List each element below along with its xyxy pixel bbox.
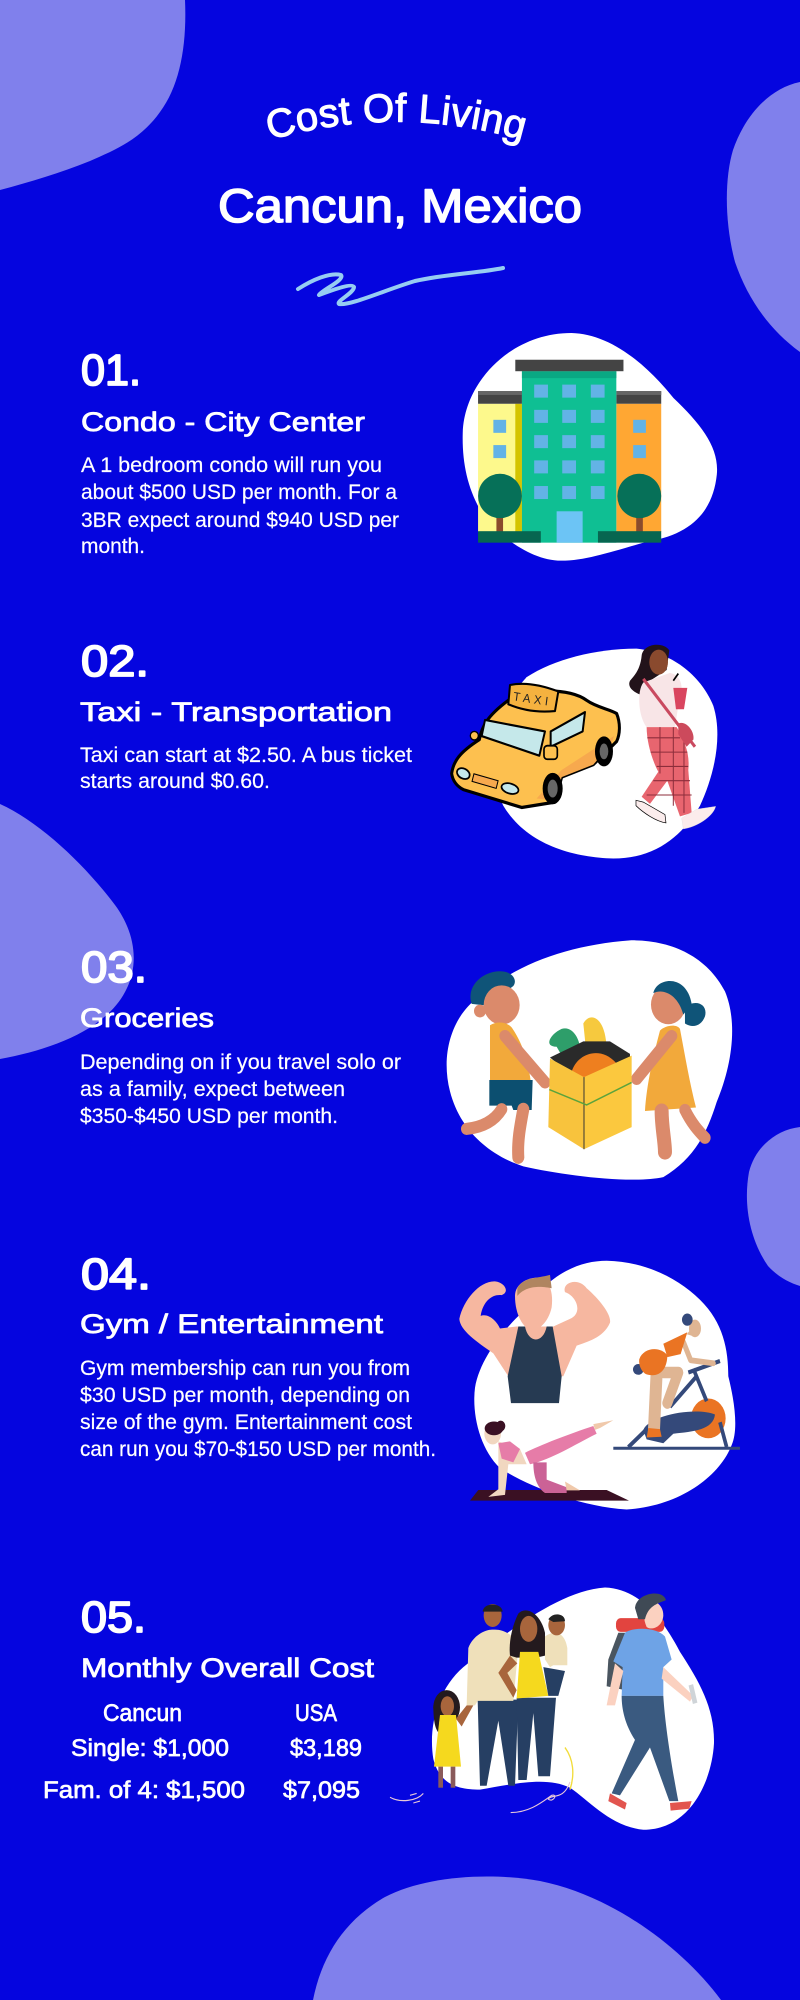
boy [467,971,545,1157]
cost comparison table: Single: $1,000 [71,1735,229,1762]
mother with child [498,1610,567,1780]
heading gym: Gym / Entertainment [80,1309,384,1339]
body groceries: as a family, expect between [80,1078,345,1101]
body taxi [80,744,412,793]
number 01: 01. [81,346,141,395]
title: Cost Of Living: Cost Of Living [267,92,526,146]
grocery bag [548,1017,632,1149]
section 04: gym text [80,1250,436,1461]
section 05: monthly overall cost text [43,1593,375,1804]
body condo: month. [81,535,145,558]
body gym: Gym membership can run you from [80,1357,410,1380]
girl [637,981,705,1152]
illustration: family carrying grocery bag [447,940,732,1180]
number 03: 03. [81,943,147,992]
number 04: 04. [81,1250,151,1299]
body taxi: Taxi can start at $2.50. A bus ticket [80,744,412,767]
hedges [478,531,541,543]
body groceries [80,1051,401,1128]
illustration: gym activities [459,1261,740,1509]
taxi [452,684,619,807]
father [467,1604,518,1786]
walking woman [629,645,716,829]
yoga woman [470,1420,629,1501]
section 01: condo text [81,346,399,558]
cost comparison table: USA [295,1700,337,1727]
cyclist [613,1314,740,1450]
heading taxi: Taxi - Transportation [80,697,392,727]
body gym: size of the gym. Entertainment cost [80,1411,412,1434]
cost comparison table: Cancun [103,1700,182,1727]
title: Cancun, Mexico: Cancun, Mexico [218,179,582,232]
squiggle underline [298,268,503,304]
decorative blob: top left [0,0,185,190]
backpacker [607,1593,697,1811]
door [557,511,583,543]
body condo [81,454,399,558]
body groceries: Depending on if you travel solo or [80,1051,401,1074]
left wing [478,404,522,532]
decorative blob: middle right [747,1127,800,1286]
main tower [522,371,616,543]
bodybuilder [459,1275,610,1403]
number 05: 05. [81,1593,146,1642]
decorative blob: top right [727,82,800,352]
decorative blob: bottom [313,1876,721,2000]
body gym [80,1357,436,1461]
windows [493,385,646,499]
cost comparison table [43,1700,362,1804]
body groceries: $350-$450 USD per month. [80,1105,338,1128]
white blob behind groceries [447,940,732,1180]
body condo: A 1 bedroom condo will run you [81,454,382,477]
section 03: groceries text [80,943,401,1128]
right wing [616,404,661,532]
illustration: family and backpacker [390,1588,714,1830]
decorative blob: middle left [0,804,134,1059]
body gym: can run you $70-$150 USD per month. [80,1438,436,1461]
decorative flourish [390,1782,570,1813]
white blob behind gym [474,1261,735,1509]
white blob behind people [432,1588,714,1830]
number 02: 02. [81,637,149,686]
white blob behind taxi [493,649,717,859]
cost comparison table: $3,189 [290,1735,362,1762]
cost comparison table: $7,095 [283,1777,360,1804]
section 02: taxi text [80,637,412,793]
cost comparison table: Fam. of 4: $1,500 [43,1777,245,1804]
body condo: about $500 USD per month. For a [81,481,397,504]
illustration: taxi and walking woman [452,645,717,859]
taxi sign label: TAXI [513,690,549,709]
body gym: $30 USD per month, depending on [80,1384,410,1407]
illustration: building on white blob [463,333,717,561]
heading condo: Condo - City Center [81,407,365,437]
little girl [433,1690,473,1788]
body taxi: starts around $0.60. [80,770,270,793]
trees [478,474,661,532]
roof [515,360,623,371]
heading groceries: Groceries [80,1003,214,1033]
white blob behind building [463,333,717,561]
heading monthly cost: Monthly Overall Cost [81,1653,375,1683]
body condo: 3BR expect around $940 USD per [81,509,399,532]
